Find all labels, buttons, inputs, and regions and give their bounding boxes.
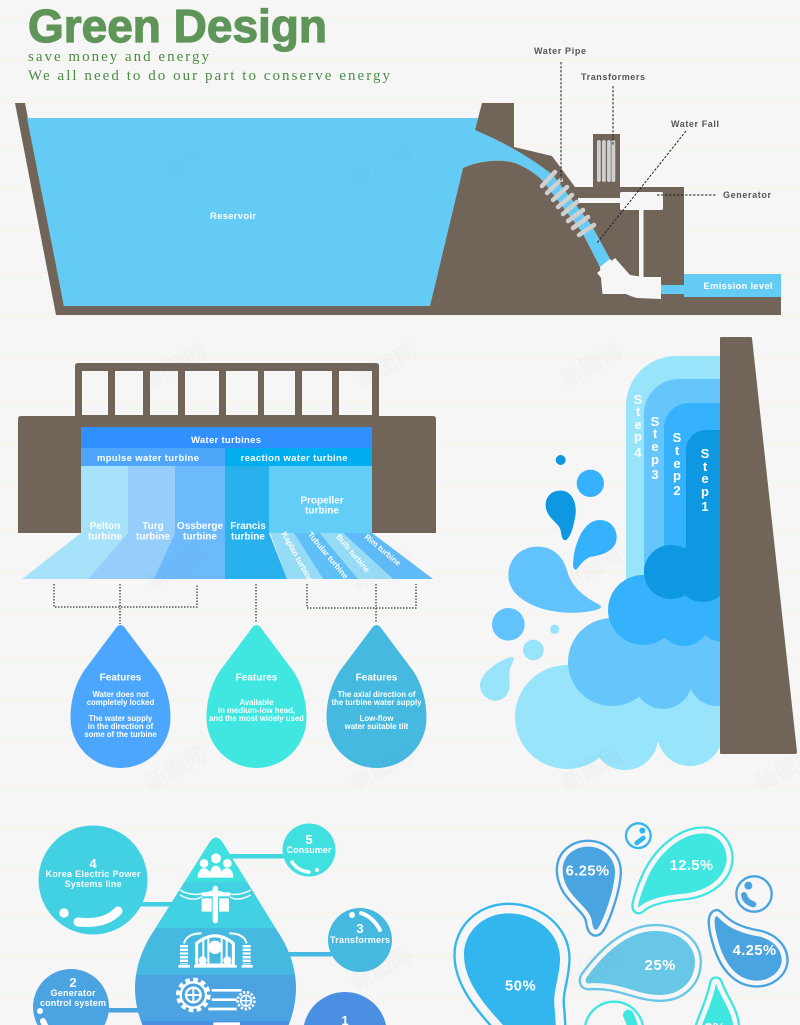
icon: transformer (178, 933, 253, 968)
node 2: Generator (50, 988, 96, 998)
node 3: Transformers (330, 935, 390, 945)
step 1 label: p (701, 484, 709, 499)
node 4 (38, 826, 148, 934)
panel: power delivery drop diagram (33, 824, 392, 1025)
step 2 label: p (673, 468, 681, 483)
drop: 4.25 percent: 4.25% (733, 943, 776, 959)
feature drop: propeller: Features (356, 672, 398, 684)
rotated turbine names: Kaplan turbine (280, 530, 315, 584)
transformer bars (597, 140, 615, 182)
drop: 4.25 percent (715, 916, 782, 981)
watermarks: 新图网 (556, 941, 626, 996)
panel: water turbines dam (18, 363, 436, 624)
feature drop: impulse: in the direction of (88, 722, 154, 731)
node 5 (282, 824, 336, 876)
reservoir wall and ground (15, 103, 440, 315)
layered drop (130, 830, 300, 1025)
watermarks: 新图网 (556, 338, 626, 393)
watermarks: 新图网 (556, 541, 626, 596)
turbine names: turbine (136, 532, 170, 542)
turbine names: Francis (230, 521, 266, 532)
feature drop: propeller: water suitable tilt (344, 722, 409, 731)
step 2 label: S (673, 430, 682, 445)
feature drop: propeller: The axial direction of (338, 690, 416, 699)
feature drop: impulse: The water supply (89, 714, 153, 723)
turbine names: Ossberge (177, 521, 224, 532)
step 3 label: 3 (651, 467, 659, 482)
feature drop: impulse: Features (100, 672, 142, 684)
step 4 label: 4 (634, 445, 642, 460)
feature drop: impulse: some of the turbine (84, 730, 157, 739)
watermarks (141, 138, 800, 996)
node 5: 5 (305, 832, 313, 847)
turbine columns (22, 466, 433, 579)
step 1 label: t (703, 459, 708, 474)
turbine names: turbine (183, 532, 217, 542)
step 4 label: p (634, 429, 642, 444)
bubble: right (736, 876, 772, 912)
drop: 50 percent (464, 913, 560, 1025)
splash drops (480, 455, 617, 701)
turbine names: turbine (231, 532, 265, 542)
base (596, 294, 781, 315)
feature drop: Francis: Features (236, 672, 278, 684)
bridge railing (75, 363, 379, 420)
feature drop: Francis: Available (240, 698, 274, 707)
feature drop: Francis (206, 625, 306, 768)
feature drop: Francis: and the most widely used (209, 714, 304, 723)
drop: 25 percent: 25% (645, 958, 675, 974)
watermarks: 新图网 (141, 338, 211, 393)
step 1 label: S (701, 446, 710, 461)
heading: water turbines: Water turbines (191, 435, 261, 446)
turbine names: Pelton (90, 521, 120, 532)
dotted connectors (54, 584, 416, 624)
feature drop: Francis: in medium-low head, (218, 706, 295, 715)
emission water (661, 274, 781, 297)
icon: power pole (180, 886, 251, 923)
turbine names (88, 496, 344, 542)
reaction header (225, 448, 372, 466)
rotated turbine names: Tubular turbine (306, 530, 350, 581)
watermarks: 新图网 (556, 741, 626, 796)
step 4 label: e (634, 417, 642, 432)
feature drop: propeller (326, 625, 426, 768)
step 1 label: e (701, 471, 709, 486)
pipe coils (542, 172, 594, 235)
label: transformers: Transformers (581, 72, 645, 82)
feature drop: impulse: Water does not (92, 690, 149, 699)
drop: 6.25 percent: 6.25% (566, 864, 609, 880)
drop: bottom partial percent (700, 983, 733, 1025)
heading: impulse: mpulse water turbine (97, 453, 199, 464)
upper dam and power house (475, 103, 684, 290)
generator (578, 192, 663, 278)
drop: 6.25 percent (563, 847, 615, 930)
drop: 25 percent (586, 931, 695, 995)
node 2: control system (40, 998, 106, 1008)
watermarks: 新图网 (141, 541, 211, 596)
icon: consumers (198, 853, 233, 878)
feature drop: propeller: Low-flow (360, 714, 394, 723)
step 3 label: S (651, 414, 660, 429)
heading: reaction: reaction water turbine (240, 453, 348, 464)
watermarks: 新图网 (141, 741, 211, 796)
icon: bottom layer partial (213, 1022, 240, 1025)
connector lines (106, 854, 332, 1012)
dam wall (720, 337, 797, 754)
panel: percentage drops (464, 823, 782, 1025)
step 1 label: 1 (701, 499, 709, 514)
feature drop: impulse: completely locked (87, 698, 155, 707)
drop: 50 percent: 50% (505, 979, 536, 995)
step 3 label: t (653, 426, 658, 441)
watermarks: 新图网 (346, 541, 416, 596)
watermarks: 新图网 (346, 941, 416, 996)
turbines header (81, 427, 372, 448)
watermarks: 新图网 (346, 138, 416, 193)
panel: waterfall steps (480, 337, 797, 770)
turbine housing (597, 258, 661, 299)
drop icons (178, 853, 254, 1025)
bubble: bottom (585, 1002, 643, 1025)
reservoir water and penstock (27, 118, 610, 306)
watermarks: 新图网 (346, 741, 416, 796)
node 4: Systems line (64, 879, 122, 889)
feature drop: impulse (70, 625, 170, 768)
node 2 (33, 969, 109, 1025)
turbine names: turbine (305, 506, 339, 516)
step 4 label: t (636, 404, 641, 419)
turbine names: Turg (142, 521, 164, 532)
dashed leader lines (561, 62, 717, 243)
node 1 (303, 992, 387, 1025)
watermarks: 新图网 (351, 338, 421, 393)
drop: 12.5 percent: 12.5% (670, 858, 713, 874)
step 3 label: e (651, 439, 659, 454)
node 4: Korea Electric Power (46, 869, 141, 879)
step 3 label: p (651, 452, 659, 467)
panel: hydro power cross-section (15, 46, 781, 315)
watermarks: 新图网 (141, 141, 211, 196)
turbine names: turbine (88, 532, 122, 542)
node 3: 3 (356, 921, 364, 936)
node 2: 2 (69, 975, 77, 990)
subtitle line 1: save money and energy (28, 49, 210, 65)
label: emission level: Emission level (704, 281, 772, 292)
icon: gears (178, 980, 254, 1010)
hill (425, 161, 640, 315)
subtitle line 2: We all need to do our part to conserve energy (28, 68, 390, 84)
step 4 label: S (634, 392, 643, 407)
step 2 label: 2 (673, 483, 681, 498)
waterfall layers (515, 356, 720, 770)
feature drop: propeller: the turbine water supply (331, 698, 422, 707)
dam body (18, 416, 436, 533)
rotated turbine names: Rim turbine (363, 532, 403, 568)
label: generator: Generator (723, 190, 771, 200)
step 2 label: e (673, 456, 681, 471)
bubble: top (626, 823, 651, 848)
drop: 12.5 percent (638, 833, 727, 907)
label: reservoir: Reservoir (210, 211, 256, 222)
step 2 label: t (675, 443, 680, 458)
node 5: Consumer (286, 845, 332, 855)
label: water pipe: Water Pipe (534, 46, 586, 56)
rotated turbine names: Bulb turbine (334, 532, 372, 575)
rotated turbine names (280, 530, 403, 584)
impulse header (81, 448, 225, 466)
title: Green Design (28, 0, 327, 52)
label: water fall: Water Fall (671, 119, 719, 129)
turbine names: Propeller (300, 496, 344, 506)
node 4: 4 (89, 856, 97, 871)
node 3 (328, 908, 392, 972)
